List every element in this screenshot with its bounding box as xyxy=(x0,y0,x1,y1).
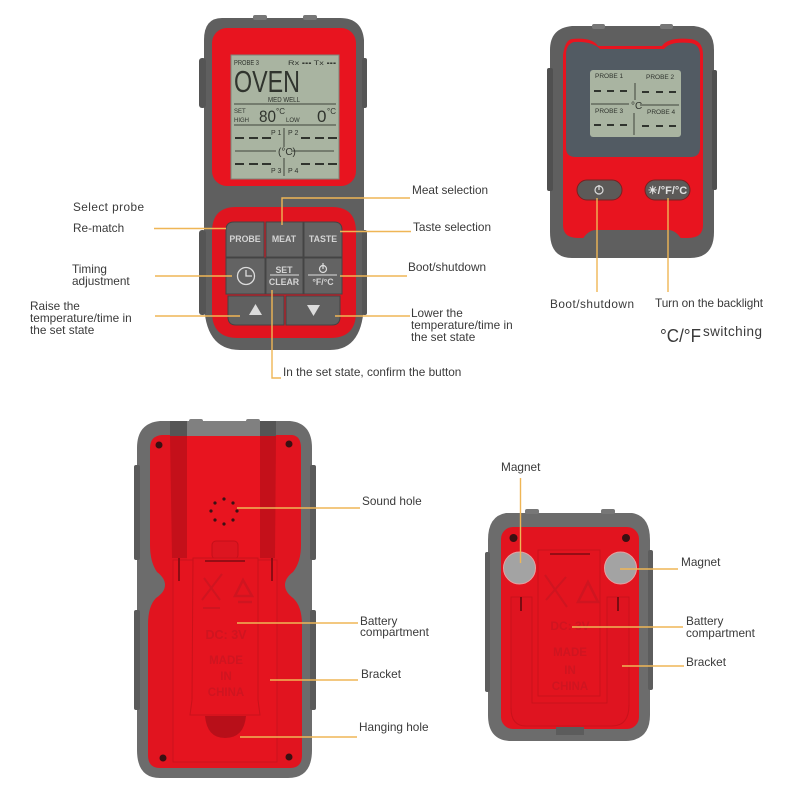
callout: raise temperature: Raise the xyxy=(30,299,80,313)
button: TASTE: TASTE xyxy=(309,234,337,244)
LCD screen: SET xyxy=(234,109,246,115)
callout: lower temperature: the set state xyxy=(411,330,476,344)
callout: raise temperature xyxy=(30,299,240,337)
callout: select probe and re-match: Select probe xyxy=(73,200,144,214)
callout: raise temperature: temperature/time in xyxy=(30,311,132,325)
callout: confirm button: In the set state, confirm the button xyxy=(283,365,461,379)
LCD screen: 80 xyxy=(259,107,276,126)
callout: lower temperature: Lower the xyxy=(411,306,463,320)
LCD screen: °C xyxy=(631,101,642,112)
red rear shell xyxy=(148,435,302,768)
callout: raise temperature: the set state xyxy=(30,323,95,337)
LCD screen: PROBE 1 xyxy=(595,73,624,80)
hanging hole xyxy=(205,716,246,738)
LCD screen: MED WELL xyxy=(268,97,300,104)
callout: transmitter bracket: Bracket xyxy=(686,655,727,669)
LCD screen: °C xyxy=(276,107,285,116)
device: front of receiver xyxy=(199,15,367,350)
callout: magnet right xyxy=(620,555,721,569)
callout: hanging hole: Hanging hole xyxy=(359,720,429,734)
callout: unit switching: °C/°F xyxy=(660,326,701,346)
callout: magnet left xyxy=(501,460,541,563)
callout: confirm button xyxy=(272,290,461,379)
LCD screen: °C xyxy=(327,107,336,116)
callout: taste selection: Taste selection xyxy=(413,220,491,234)
battery door: MADE xyxy=(553,647,587,659)
callout: magnet left: Magnet xyxy=(501,460,541,474)
button: SET CLEAR: SET xyxy=(275,265,293,275)
casing xyxy=(488,513,650,741)
callout: bracket: Bracket xyxy=(361,667,402,681)
callout: magnet right: Magnet xyxy=(681,555,721,569)
button: SET CLEAR: CLEAR xyxy=(269,277,300,287)
button: up xyxy=(228,296,284,325)
screen bezel xyxy=(212,28,356,186)
casing xyxy=(550,26,714,258)
keypad surround xyxy=(212,207,356,338)
magnet left xyxy=(504,552,536,584)
callout: transmitter bracket xyxy=(622,655,727,669)
callout: bracket xyxy=(270,667,402,681)
callout: timing adjustment: adjustment xyxy=(72,274,130,288)
LCD screen: P 1 xyxy=(271,130,281,137)
red rear shell xyxy=(501,527,639,729)
button: power xyxy=(577,180,622,200)
battery door: MADE xyxy=(209,655,243,667)
button: backlight and unit xyxy=(645,180,690,200)
callout: meat selection: Meat selection xyxy=(412,183,488,197)
button: down xyxy=(286,296,340,325)
dark channels at top xyxy=(170,421,276,436)
bracket xyxy=(173,560,277,762)
LCD screen: PROBE 2 xyxy=(646,74,675,81)
casing xyxy=(137,421,312,778)
bottom latch xyxy=(556,727,584,735)
battery door xyxy=(190,558,260,715)
screws xyxy=(510,534,630,542)
callout: timing adjustment xyxy=(72,262,232,288)
button: backlight and unit: ☀/°F/°C xyxy=(648,185,687,197)
LCD screen xyxy=(590,70,681,137)
battery door xyxy=(538,550,600,696)
callout: lower temperature xyxy=(335,306,513,344)
dark panel xyxy=(566,42,700,157)
screws xyxy=(156,440,292,762)
device: front of transmitter xyxy=(547,24,717,258)
callout: battery compartment: compartment xyxy=(360,625,430,639)
callout: unit switching xyxy=(660,324,762,346)
LCD screen: PROBE 4 xyxy=(647,109,676,116)
callout: boot/shutdown: Boot/shutdown xyxy=(408,260,486,274)
callout: timing adjustment: Timing xyxy=(72,262,107,276)
callout: transmitter battery compartment: Battery xyxy=(686,614,723,628)
body casing xyxy=(204,18,364,350)
keypad xyxy=(226,222,342,325)
battery door: CHINA xyxy=(208,687,244,699)
battery door: CHINA xyxy=(552,681,588,693)
top clip band xyxy=(187,421,260,436)
battery door: DC: 3V xyxy=(550,619,590,633)
magnet right xyxy=(604,552,636,584)
LCD screen: 0 xyxy=(317,107,326,126)
callout: select probe and re-match xyxy=(73,200,226,235)
callout: battery compartment: Battery xyxy=(360,614,397,628)
LCD screen: LOW xyxy=(286,118,300,124)
button: MEAT: MEAT xyxy=(272,234,297,244)
device: back of receiver xyxy=(134,419,316,778)
callout: transmitter battery compartment xyxy=(572,614,756,640)
battery door: IN xyxy=(220,671,232,683)
callout: battery compartment xyxy=(237,614,430,639)
button: power and unit: °F/°C xyxy=(312,277,334,287)
button: timer xyxy=(226,258,265,294)
clip xyxy=(187,436,260,560)
bottom gray tab xyxy=(582,230,682,240)
icon: sound holes xyxy=(209,497,239,526)
bracket outline xyxy=(511,597,629,726)
callout: transmitter boot/shutdown xyxy=(550,198,634,311)
battery door: IN xyxy=(564,665,576,677)
LCD screen: PROBE 3 xyxy=(595,108,624,115)
callout: turn on the backlight xyxy=(655,198,764,310)
LCD screen: P 3 xyxy=(271,168,281,175)
LCD screen: Rx ▪▪▪ Tx ▪▪▪ xyxy=(288,61,336,67)
LCD screen: OVEN xyxy=(234,64,300,99)
battery tab xyxy=(212,541,238,559)
LCD screen: P 2 xyxy=(288,130,298,137)
LCD screen: P 4 xyxy=(288,168,298,175)
battery door: DC: 3V xyxy=(206,628,247,642)
callout: meat selection xyxy=(282,183,488,225)
LCD screen: PROBE 3 xyxy=(234,60,259,67)
red face xyxy=(563,39,703,238)
LCD screen xyxy=(231,55,339,179)
callout: sound hole: Sound hole xyxy=(362,494,422,508)
callout: lower temperature: temperature/time in xyxy=(411,318,513,332)
slots beside clip xyxy=(170,436,187,558)
button: PROBE: PROBE xyxy=(229,234,261,244)
device: back of transmitter xyxy=(485,509,653,741)
callout: transmitter battery compartment: compartment xyxy=(686,626,756,640)
callout: unit switching: switching xyxy=(703,324,762,339)
button: SET CLEAR xyxy=(266,258,303,294)
callout: select probe and re-match: Re-match xyxy=(73,221,124,235)
LCD screen: HIGH xyxy=(234,118,249,124)
callout: transmitter boot/shutdown: Boot/shutdown xyxy=(550,297,634,311)
LCD screen: (°C) xyxy=(278,147,296,158)
callout: turn on the backlight: Turn on the backlight xyxy=(655,296,764,310)
